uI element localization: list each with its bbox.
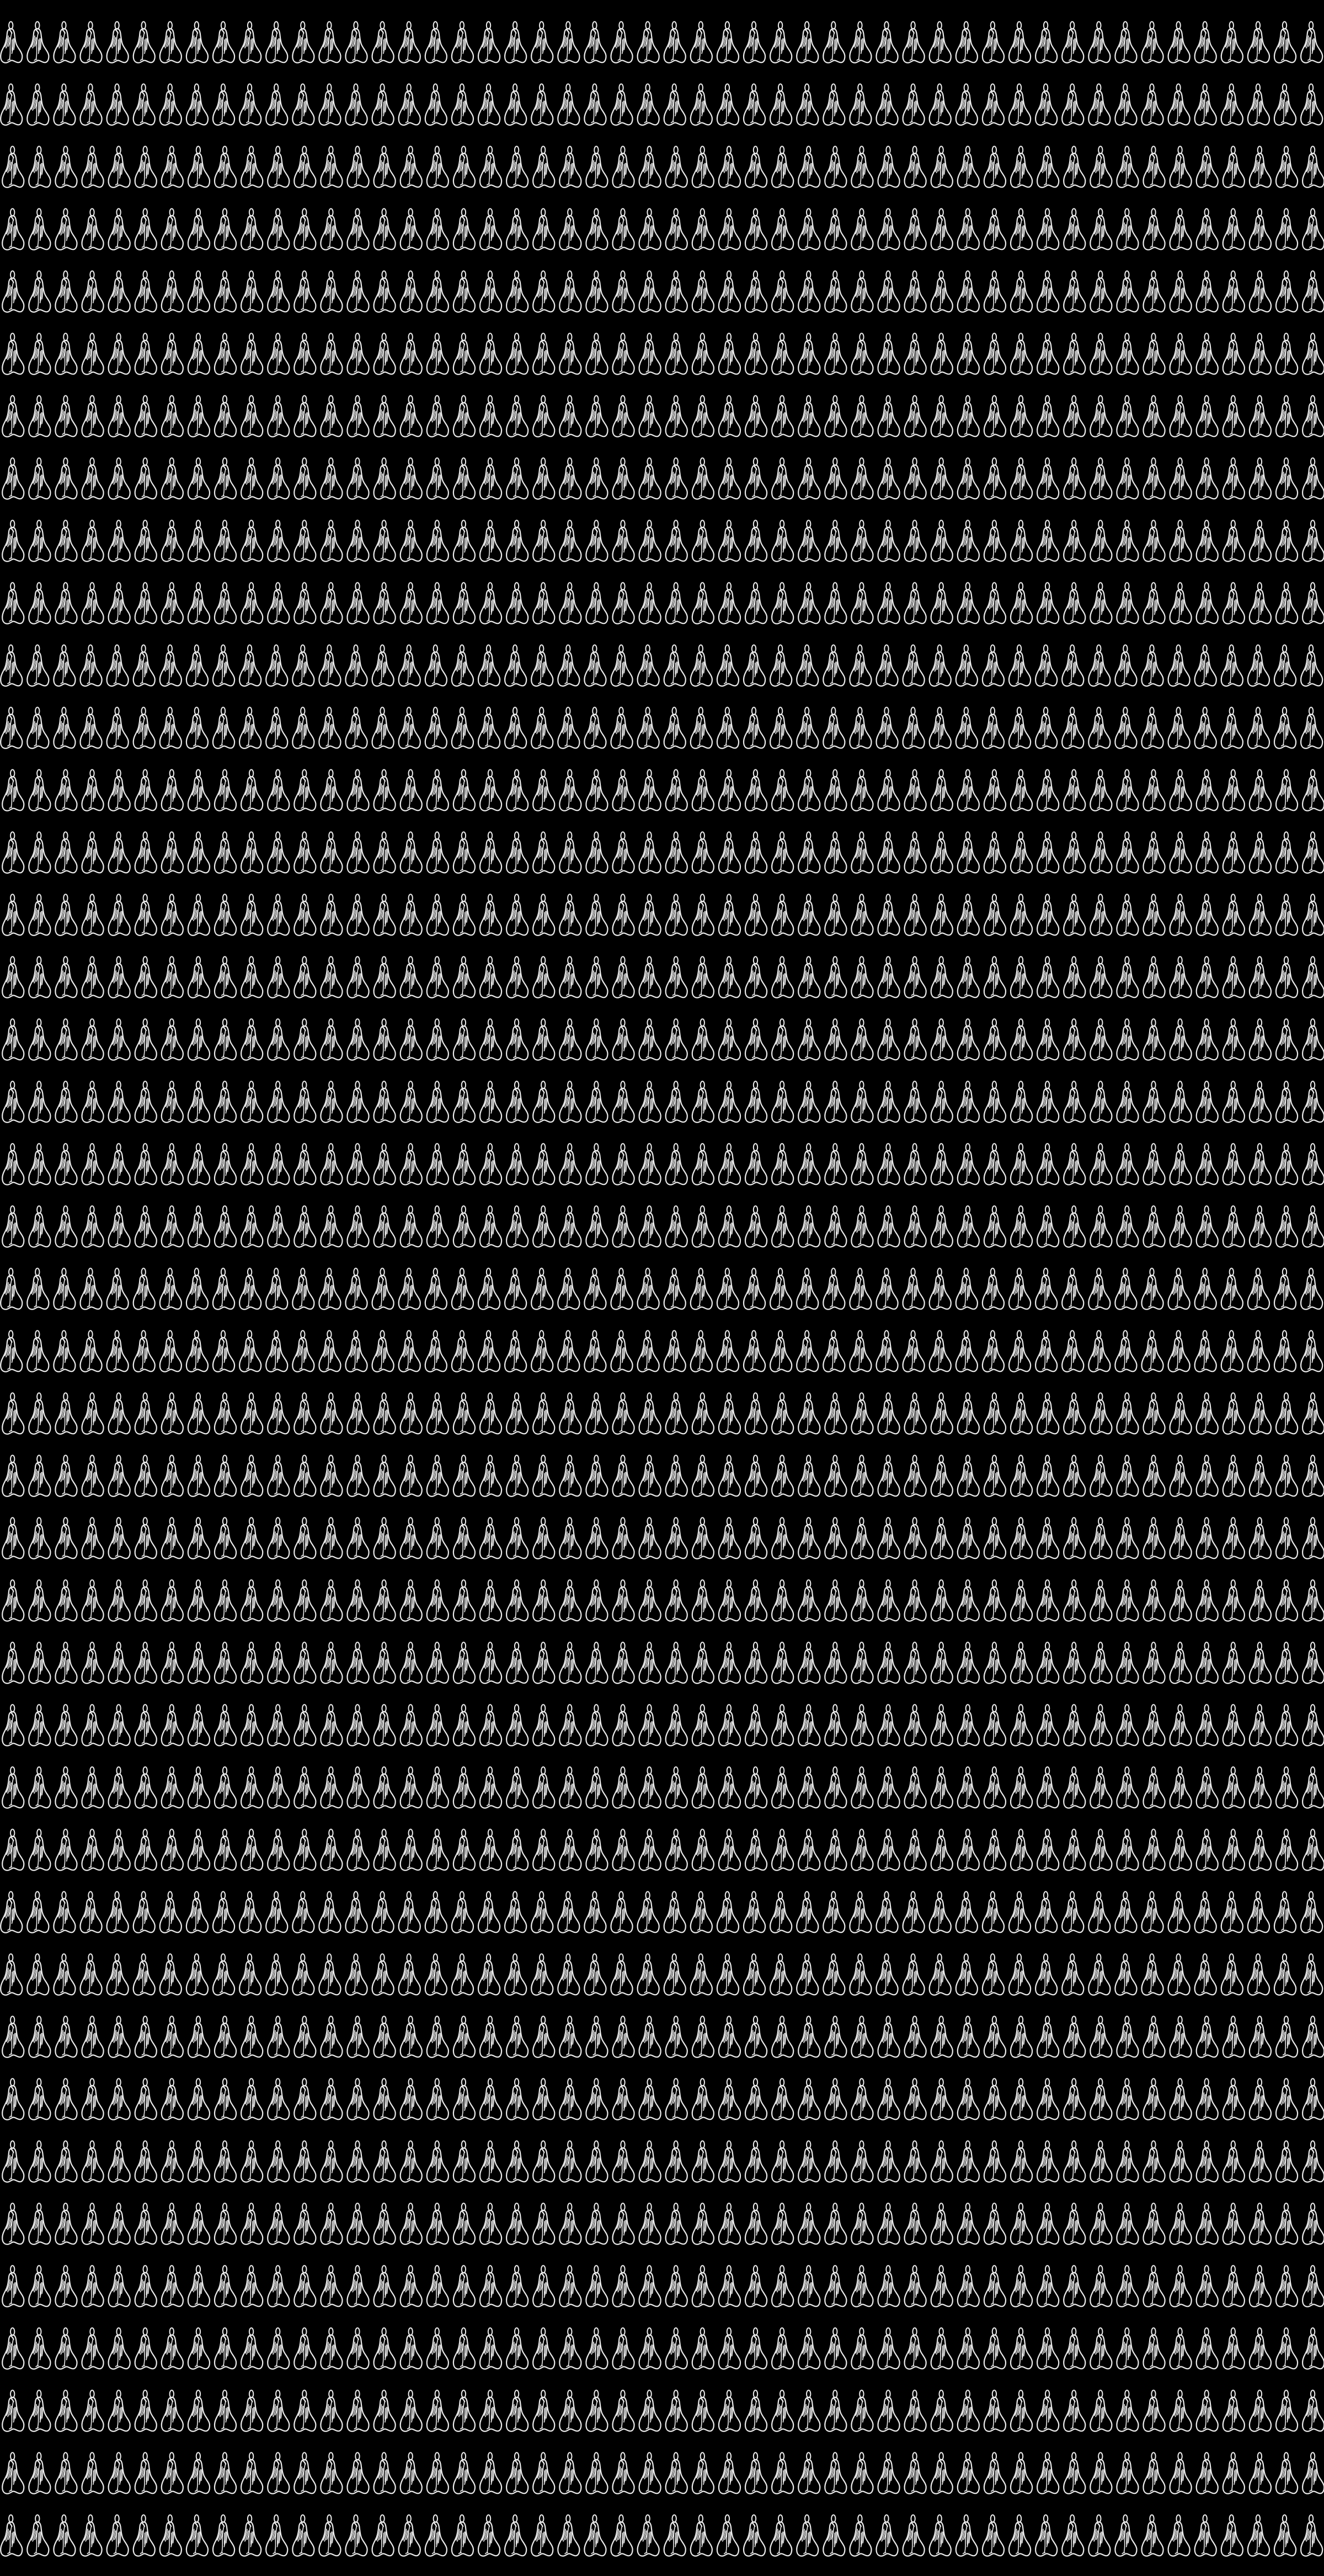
icon rows 31 to 40 [1, 1891, 1324, 2494]
icon rows 1 to 10 [1, 22, 1324, 624]
icon rows 11 to 20 [1, 645, 1324, 1247]
icon rows 21 to 30 [1, 1268, 1324, 1870]
icon row 41 [1, 2515, 1322, 2556]
